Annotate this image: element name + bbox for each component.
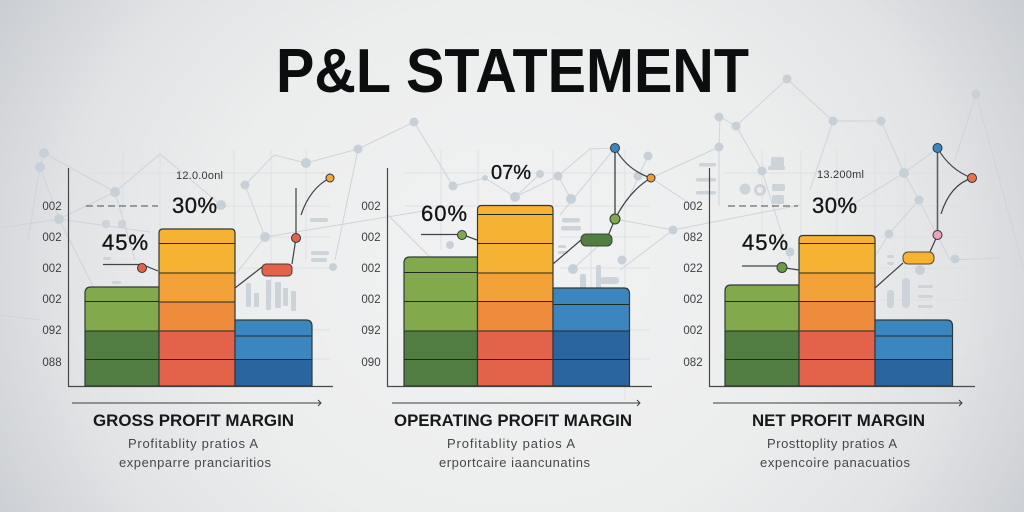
chart axes <box>710 168 975 386</box>
stacked bar: blue <box>553 288 630 386</box>
panel: gross profit margin <box>42 168 334 470</box>
y axis labels: 002 <box>42 201 62 213</box>
chart axes <box>68 168 333 386</box>
arrow <box>713 400 962 406</box>
value label: 13.200ml <box>817 169 864 181</box>
y axis labels <box>683 201 703 369</box>
y axis labels: 082 <box>683 357 703 369</box>
stacked bar: green <box>404 257 478 386</box>
y axis labels: 092 <box>361 325 381 337</box>
stacked bar: green <box>725 285 799 386</box>
y axis labels: 090 <box>361 357 381 369</box>
y axis labels: 002 <box>361 232 381 244</box>
y axis labels: 002 <box>42 263 62 275</box>
stacked bar: orange <box>799 236 875 386</box>
dashed leader <box>728 205 798 207</box>
value label: 12.0.0onl <box>176 170 223 182</box>
annotation connectors <box>742 144 976 288</box>
description <box>439 436 590 470</box>
y axis labels: 002 <box>683 325 703 337</box>
annotation connectors <box>103 174 334 288</box>
description <box>119 436 272 470</box>
y axis labels: 002 <box>42 232 62 244</box>
stacked bar: green <box>85 287 159 386</box>
y axis labels: 002 <box>361 294 381 306</box>
arrow <box>72 400 321 406</box>
stacked bar: blue <box>875 320 952 386</box>
y axis labels: 082 <box>683 232 703 244</box>
stacked bar: orange <box>159 229 235 386</box>
y axis labels <box>42 201 62 369</box>
y axis labels: 002 <box>683 294 703 306</box>
percentage 07%: 07% <box>491 162 531 184</box>
heading: GROSS PROFIT MARGIN <box>93 411 294 430</box>
panel: net profit margin <box>683 144 976 470</box>
percentage 45%: 45% <box>102 230 148 255</box>
stacked bar: orange <box>478 206 553 386</box>
arrow <box>392 400 640 406</box>
y axis labels: 022 <box>683 263 703 275</box>
heading: NET PROFIT MARGIN <box>752 411 925 430</box>
description: expenparre pranciaritios <box>119 455 272 470</box>
y axis labels: 002 <box>42 294 62 306</box>
description: Profitablity pratios A <box>128 436 258 451</box>
y axis labels: 002 <box>683 201 703 213</box>
percentage 30%: 30% <box>812 193 857 218</box>
annotation connectors <box>421 144 655 264</box>
description: erportcaire iaancunatins <box>439 455 590 470</box>
description: Profitablity patios A <box>447 436 575 451</box>
heading: OPERATING PROFIT MARGIN <box>394 411 632 430</box>
y axis labels: 092 <box>42 325 62 337</box>
panel: operating profit margin <box>361 144 655 470</box>
y axis labels <box>361 201 381 369</box>
description: expencoire panacuatios <box>760 455 910 470</box>
y axis labels: 088 <box>42 357 62 369</box>
percentage 30%: 30% <box>172 193 217 218</box>
background network pattern <box>0 74 1024 400</box>
dashed leader <box>86 205 158 207</box>
description: Prosttoplity pratios A <box>767 436 897 451</box>
y axis labels: 002 <box>361 201 381 213</box>
title: P&L STATEMENT <box>276 37 749 106</box>
chart axes <box>388 168 652 386</box>
stacked bar: blue <box>235 320 312 386</box>
percentage 60%: 60% <box>421 201 467 226</box>
description <box>760 436 910 470</box>
percentage 45%: 45% <box>742 230 788 255</box>
y axis labels: 002 <box>361 263 381 275</box>
